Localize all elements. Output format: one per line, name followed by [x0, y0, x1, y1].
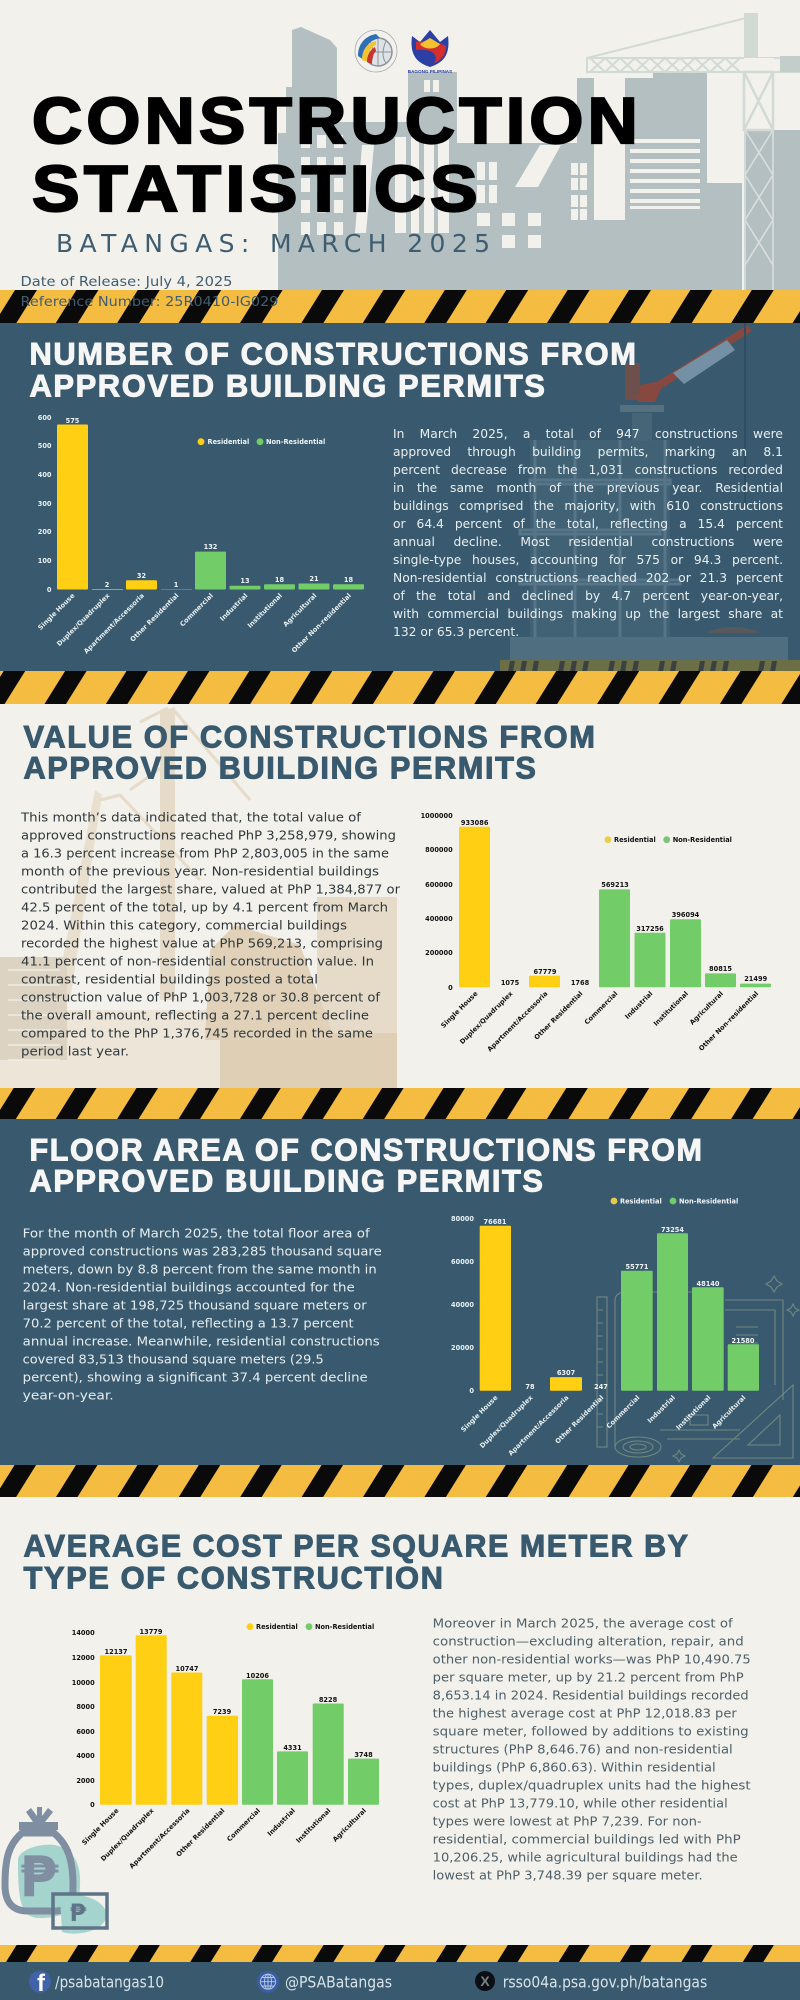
bar chart: average cost: Commercial: [225, 1807, 262, 1843]
bar chart: number of constructions: 0: [47, 586, 52, 594]
bar chart: value of constructions: Commercial: [583, 990, 619, 1026]
bar chart: number of constructions: 2: [105, 581, 110, 589]
text block: value of constructions: contributed the largest share, valued at PhP 1,384,877 or: [21, 882, 401, 897]
bar chart: value of constructions: 569213: [601, 881, 629, 889]
bar chart: average cost: 2000: [76, 1777, 95, 1785]
bar chart: value of constructions: 1075: [501, 979, 520, 987]
icon: money bag with peso: ₱: [70, 1899, 87, 1927]
heading: floor area: FLOOR AREA OF CONSTRUCTIONS FROM: [30, 1132, 704, 1168]
text block: number of constructions: [393, 426, 783, 638]
text block: value of constructions: 42.5 percent of the total, up by 4.1 percent from March: [21, 900, 388, 915]
bar chart: number of constructions: Other Residential: [129, 592, 180, 644]
bar chart: value of constructions: 200000: [425, 949, 453, 957]
text block: floor area: percent), showing a significant 37.4 percent decline: [23, 1369, 368, 1384]
bar chart: value of constructions: Single House: [439, 989, 480, 1030]
bar chart: number of constructions: Industrial: [218, 592, 249, 623]
bar chart: average cost: 10206: [246, 1672, 269, 1680]
bar chart: floor area: Agricultural: [711, 1394, 747, 1431]
icon: facebook: [29, 1970, 51, 1997]
hazard stripe 1: [0, 290, 800, 323]
title: CONSTRUCTION: [32, 84, 642, 157]
bar chart: average cost: 12137: [105, 1648, 128, 1656]
bar chart: value of constructions: 600000: [425, 881, 453, 889]
web address: rsso04a.psa.gov.ph/batangas: [503, 1972, 707, 1992]
bar chart: value of constructions: 400000: [425, 915, 453, 923]
bar chart: floor area: 20000: [451, 1344, 474, 1352]
heading: value of constructions: [24, 718, 596, 786]
heading: average cost: TYPE OF CONSTRUCTION: [24, 1560, 444, 1596]
text block: average cost: types, duplex/quadruplex units had the highest: [433, 1777, 751, 1792]
bar chart: average cost: 8228: [319, 1696, 338, 1704]
bar chart: number of constructions: 100: [38, 557, 52, 565]
bar chart: floor area: Non-Residential: [679, 1197, 738, 1205]
bar chart: average cost: Apartment/Accessoria: [128, 1807, 191, 1870]
bar chart: average cost: Other Residential: [175, 1807, 226, 1859]
bar chart: number of constructions: Agricultural: [282, 592, 318, 629]
heading: floor area: APPROVED BUILDING PERMITS: [30, 1162, 544, 1198]
text block: number of constructions: annual decline. Most residential constructions were: [393, 534, 783, 548]
bar chart: floor area: Commercial: [605, 1394, 641, 1430]
text block: number of constructions: approved through building permits, marking an 8.1: [393, 444, 783, 458]
bar chart: average cost: 8000: [76, 1703, 95, 1711]
bar chart: average cost: Industrial: [266, 1807, 297, 1838]
bar chart: number of constructions: 400: [38, 471, 52, 479]
text block: value of constructions: approved constructions reached PhP 3,258,979, showing: [21, 828, 396, 843]
bar chart: floor area: Duplex/Quadruplex: [478, 1393, 535, 1450]
heading: average cost: [24, 1528, 690, 1596]
logo: Bagong Pilipinas: [408, 30, 452, 74]
heading: floor area: [30, 1132, 704, 1198]
bar chart: average cost: 0: [90, 1801, 95, 1809]
bar chart: floor area: [451, 1197, 759, 1457]
bar chart: floor area: Residential: [620, 1197, 662, 1205]
text block: average cost: structures (PhP 8,646.76) and non-residential: [433, 1741, 733, 1756]
bar chart: number of constructions: Non-Residential: [266, 438, 325, 446]
bar chart: number of constructions: 600: [38, 414, 52, 422]
release details: Date of Release: July 4, 2025: [20, 274, 232, 290]
text block: average cost: types were lowest at PhP 7,239. For non-: [433, 1813, 702, 1828]
text block: floor area: For the month of March 2025, the total floor area of: [23, 1225, 370, 1240]
text block: number of constructions: In March 2025, a total of 947 constructions were: [393, 426, 783, 440]
icon: money bag with peso: [5, 1807, 107, 1934]
bar chart: average cost: 4000: [76, 1752, 95, 1760]
bar chart: value of constructions: Other Non-residential: [697, 990, 760, 1053]
title: STATISTICS: [32, 152, 482, 225]
text block: value of constructions: the overall amount, reflecting a 27.1 percent decline: [21, 1008, 369, 1023]
bar chart: value of constructions: 396094: [672, 911, 700, 919]
bar chart: number of constructions: 18: [275, 576, 284, 584]
text block: average cost: Moreover in March 2025, the average cost of: [433, 1615, 733, 1630]
bar chart: floor area: Industrial: [646, 1394, 677, 1425]
text block: average cost: construction—excluding alteration, repair, and: [433, 1633, 744, 1648]
bar chart: value of constructions: 317256: [636, 925, 664, 933]
bar chart: value of constructions: Agricultural: [688, 990, 725, 1027]
text block: average cost: buildings (PhP 6,860.63). Within residential: [433, 1759, 716, 1774]
bar chart: floor area: 78: [525, 1383, 535, 1391]
construction silhouette background: [0, 707, 397, 1088]
bar chart: number of constructions: Apartment/Accessoria: [82, 592, 146, 655]
bar chart: number of constructions: 32: [137, 572, 146, 580]
website handle: @PSABatangas: [285, 1972, 392, 1992]
icon: X: [475, 1971, 495, 1991]
heading: average cost: AVERAGE COST PER SQUARE METER BY: [24, 1528, 690, 1564]
heading: number of constructions: APPROVED BUILDING PERMITS: [30, 368, 546, 404]
bar chart: average cost: Institutional: [294, 1807, 332, 1845]
bar chart: average cost: 10747: [176, 1665, 199, 1673]
text block: average cost: square meter, followed by additions to existing: [433, 1723, 749, 1738]
text block: floor area: year-on-year.: [23, 1387, 114, 1402]
text block: average cost: other non-residential works—was PhP 10,490.75: [433, 1651, 751, 1666]
heading: number of constructions: [30, 336, 638, 404]
hazard stripe 3: [0, 1088, 800, 1119]
bar chart: floor area: Apartment/Accessoria: [507, 1394, 570, 1457]
bar chart: number of constructions: 300: [38, 500, 52, 508]
text block: average cost: [433, 1615, 751, 1882]
bar chart: floor area: 60000: [451, 1258, 474, 1266]
bar chart: number of constructions: Commercial: [178, 592, 215, 628]
text block: average cost: lowest at PhP 3,748.39 per square meter.: [433, 1867, 703, 1882]
facebook handle: /psabatangas10: [55, 1972, 164, 1992]
text block: average cost: residential, commercial buildings led with PhP: [433, 1831, 741, 1846]
header skyline background: [278, 13, 800, 290]
bar chart: floor area: Other Residential: [554, 1394, 605, 1446]
text block: average cost: 10,206.25, while agricultural buildings had the: [433, 1849, 738, 1864]
text block: number of constructions: Non-residential constructions reached 202 or 21.3 percent: [393, 570, 783, 584]
bar chart: value of constructions: Other Residential: [533, 990, 584, 1042]
text block: value of constructions: contrast, residential buildings posted a total: [21, 972, 318, 987]
text block: number of constructions: 132 or 65.3 percent.: [393, 624, 519, 638]
bar chart: floor area: 48140: [697, 1280, 720, 1288]
heading: value of constructions: APPROVED BUILDING PERMITS: [24, 750, 538, 786]
bar chart: average cost: [72, 1623, 379, 1870]
bar chart: average cost: 4331: [283, 1744, 302, 1752]
text block: value of constructions: compared to the PhP 1,376,745 recorded in the same: [21, 1026, 373, 1041]
text block: floor area: meters, down by 8.8 percent from the same month in: [23, 1261, 377, 1276]
icon: X: X: [480, 1973, 490, 1989]
text block: average cost: 8,653.14 in 2024. Residential buildings recorded: [433, 1687, 749, 1702]
bar chart: number of constructions: Residential: [208, 438, 249, 446]
text block: average cost: the highest average cost at PhP 12,018.83 per: [433, 1705, 738, 1720]
bar chart: value of constructions: 1000000: [421, 812, 453, 820]
bar chart: floor area: 76681: [484, 1218, 507, 1226]
bar chart: value of constructions: [421, 812, 771, 1053]
bar chart: value of constructions: 1768: [571, 979, 590, 987]
bar chart: value of constructions: Duplex/Quadruplex: [458, 989, 515, 1046]
text block: number of constructions: buildings comprised the majority, with 610 constructions: [393, 498, 783, 512]
release details: [20, 274, 278, 310]
text block: floor area: annual increase. Meanwhile, residential constructions: [23, 1333, 380, 1348]
text block: floor area: 2024. Non-residential buildings accounted for the: [23, 1279, 355, 1294]
bar chart: average cost: 14000: [72, 1629, 95, 1637]
bar chart: average cost: 6000: [76, 1728, 95, 1736]
bar chart: number of constructions: Duplex/Quadruplex: [55, 591, 112, 648]
bar chart: floor area: 80000: [451, 1215, 474, 1223]
bar chart: average cost: Duplex/Quadruplex: [99, 1806, 156, 1863]
bar chart: floor area: 247: [594, 1383, 608, 1391]
release details: Reference Number: 25R0410-IG029: [20, 294, 278, 310]
panel: floor area: [0, 1119, 800, 1465]
bar chart: average cost: Residential: [256, 1623, 298, 1631]
panel: number of constructions: [0, 323, 800, 673]
subtitle: BATANGAS: MARCH 2025: [56, 229, 490, 258]
icon: globe: [257, 1971, 279, 1993]
bar chart: floor area: 0: [469, 1387, 474, 1395]
bar chart: number of constructions: [36, 414, 364, 655]
bar chart: average cost: Non-Residential: [315, 1623, 374, 1631]
text block: value of constructions: This month’s data indicated that, the total value of: [20, 810, 362, 825]
bar chart: value of constructions: 21499: [744, 975, 768, 983]
bar chart: average cost: Agricultural: [331, 1807, 368, 1844]
bar chart: number of constructions: Single House: [36, 591, 77, 632]
text block: floor area: 70.2 percent of the total, reflecting a 13.7 percent: [23, 1315, 354, 1330]
crane and block tower background: [500, 323, 800, 672]
text block: floor area: covered 83,513 thousand square meters (29.5: [23, 1351, 324, 1366]
bar chart: average cost: 13779: [140, 1628, 163, 1636]
text block: floor area: largest share at 198,725 thousand square meters or: [23, 1297, 368, 1312]
bar chart: number of constructions: Institutional: [246, 592, 284, 630]
heading: number of constructions: NUMBER OF CONSTRUCTIONS FROM: [30, 336, 638, 372]
bar chart: value of constructions: Residential: [614, 836, 656, 844]
bar chart: number of constructions: 200: [38, 528, 52, 536]
text block: number of constructions: single-type houses, accounting for 575 or 94.3 percent.: [393, 552, 783, 566]
bar chart: average cost: 12000: [72, 1654, 95, 1662]
bar chart: average cost: 7239: [213, 1708, 232, 1716]
text block: value of constructions: [20, 810, 401, 1059]
bar chart: value of constructions: Apartment/Accessoria: [486, 990, 549, 1053]
bar chart: number of constructions: 18: [344, 576, 353, 584]
hazard stripe 4: [0, 1465, 800, 1497]
text block: value of constructions: recorded the highest value at PhP 569,213, comprising: [21, 936, 383, 951]
bar chart: number of constructions: 500: [38, 442, 52, 450]
bar chart: value of constructions: Institutional: [652, 990, 690, 1028]
bar chart: value of constructions: 800000: [425, 846, 453, 854]
bar chart: value of constructions: 67779: [534, 968, 557, 976]
icon: money bag with peso: ₱: [20, 1845, 59, 1910]
hazard stripe 2: [0, 671, 800, 704]
text block: average cost: cost at PhP 13,779.10, while other residential: [433, 1795, 728, 1810]
text block: floor area: approved constructions was 283,285 thousand square: [23, 1243, 382, 1258]
bar chart: floor area: 40000: [451, 1301, 474, 1309]
bar chart: number of constructions: 1: [174, 581, 179, 589]
bar chart: floor area: Institutional: [674, 1394, 712, 1432]
bar chart: number of constructions: 13: [240, 577, 250, 585]
bar chart: floor area: 55771: [626, 1263, 649, 1271]
text block: value of constructions: 41.1 percent of non-residential construction value. In: [21, 954, 374, 969]
text block: number of constructions: percent decrease from the 1,031 constructions recorded: [393, 462, 783, 476]
bar chart: floor area: 21580: [732, 1337, 755, 1345]
icon: facebook: f: [37, 1970, 46, 1997]
bar chart: number of constructions: Other Non-residential: [290, 592, 353, 655]
hazard stripe 5: [0, 1945, 800, 1962]
bar chart: value of constructions: Industrial: [623, 990, 654, 1021]
text block: value of constructions: construction value of PhP 1,003,728 or 30.8 percent of: [21, 990, 381, 1005]
text block: number of constructions: with commercial buildings making up the largest share at: [393, 606, 783, 620]
bar chart: floor area: 6307: [557, 1369, 576, 1377]
bar chart: average cost: Single House: [80, 1806, 121, 1847]
bar chart: average cost: 10000: [72, 1679, 95, 1687]
bar chart: number of constructions: 575: [66, 417, 80, 425]
bar chart: average cost: 3748: [354, 1751, 373, 1759]
text block: value of constructions: month of the previous year. Non-residential buildings: [21, 864, 379, 879]
text block: number of constructions: or 64.4 percent of the total, reflecting a 15.4 percent: [393, 516, 783, 530]
text block: average cost: per square meter, up by 21.2 percent from PhP: [433, 1669, 744, 1684]
bar chart: value of constructions: 933086: [461, 819, 489, 827]
footer bar: [0, 1962, 800, 2000]
text block: value of constructions: 2024. Within this category, commercial buildings: [21, 918, 347, 933]
text block: value of constructions: period last year.: [21, 1044, 129, 1059]
text block: floor area: [23, 1225, 382, 1402]
bar chart: floor area: 73254: [661, 1226, 684, 1234]
text block: number of constructions: of the total and declined by 4.7 percent year-on-year,: [393, 588, 783, 602]
bar chart: value of constructions: Non-Residential: [673, 836, 732, 844]
logo: PSA seal: [355, 30, 397, 72]
text block: number of constructions: in the same month of the previous year. Residential: [393, 480, 783, 494]
bar chart: value of constructions: 0: [448, 984, 453, 992]
logo: Bagong Pilipinas: BAGONG PILIPINAS: [408, 69, 452, 74]
blueprint background: [597, 1276, 799, 1462]
title: [32, 84, 642, 225]
bar chart: number of constructions: 21: [309, 575, 319, 583]
bar chart: value of constructions: 80815: [709, 965, 732, 973]
bar chart: floor area: Single House: [459, 1393, 500, 1434]
text block: value of constructions: a 16.3 percent increase from PhP 2,803,005 in the same: [21, 846, 389, 861]
bar chart: number of constructions: 132: [204, 543, 218, 551]
heading: value of constructions: VALUE OF CONSTRUCTIONS FROM: [24, 718, 596, 754]
